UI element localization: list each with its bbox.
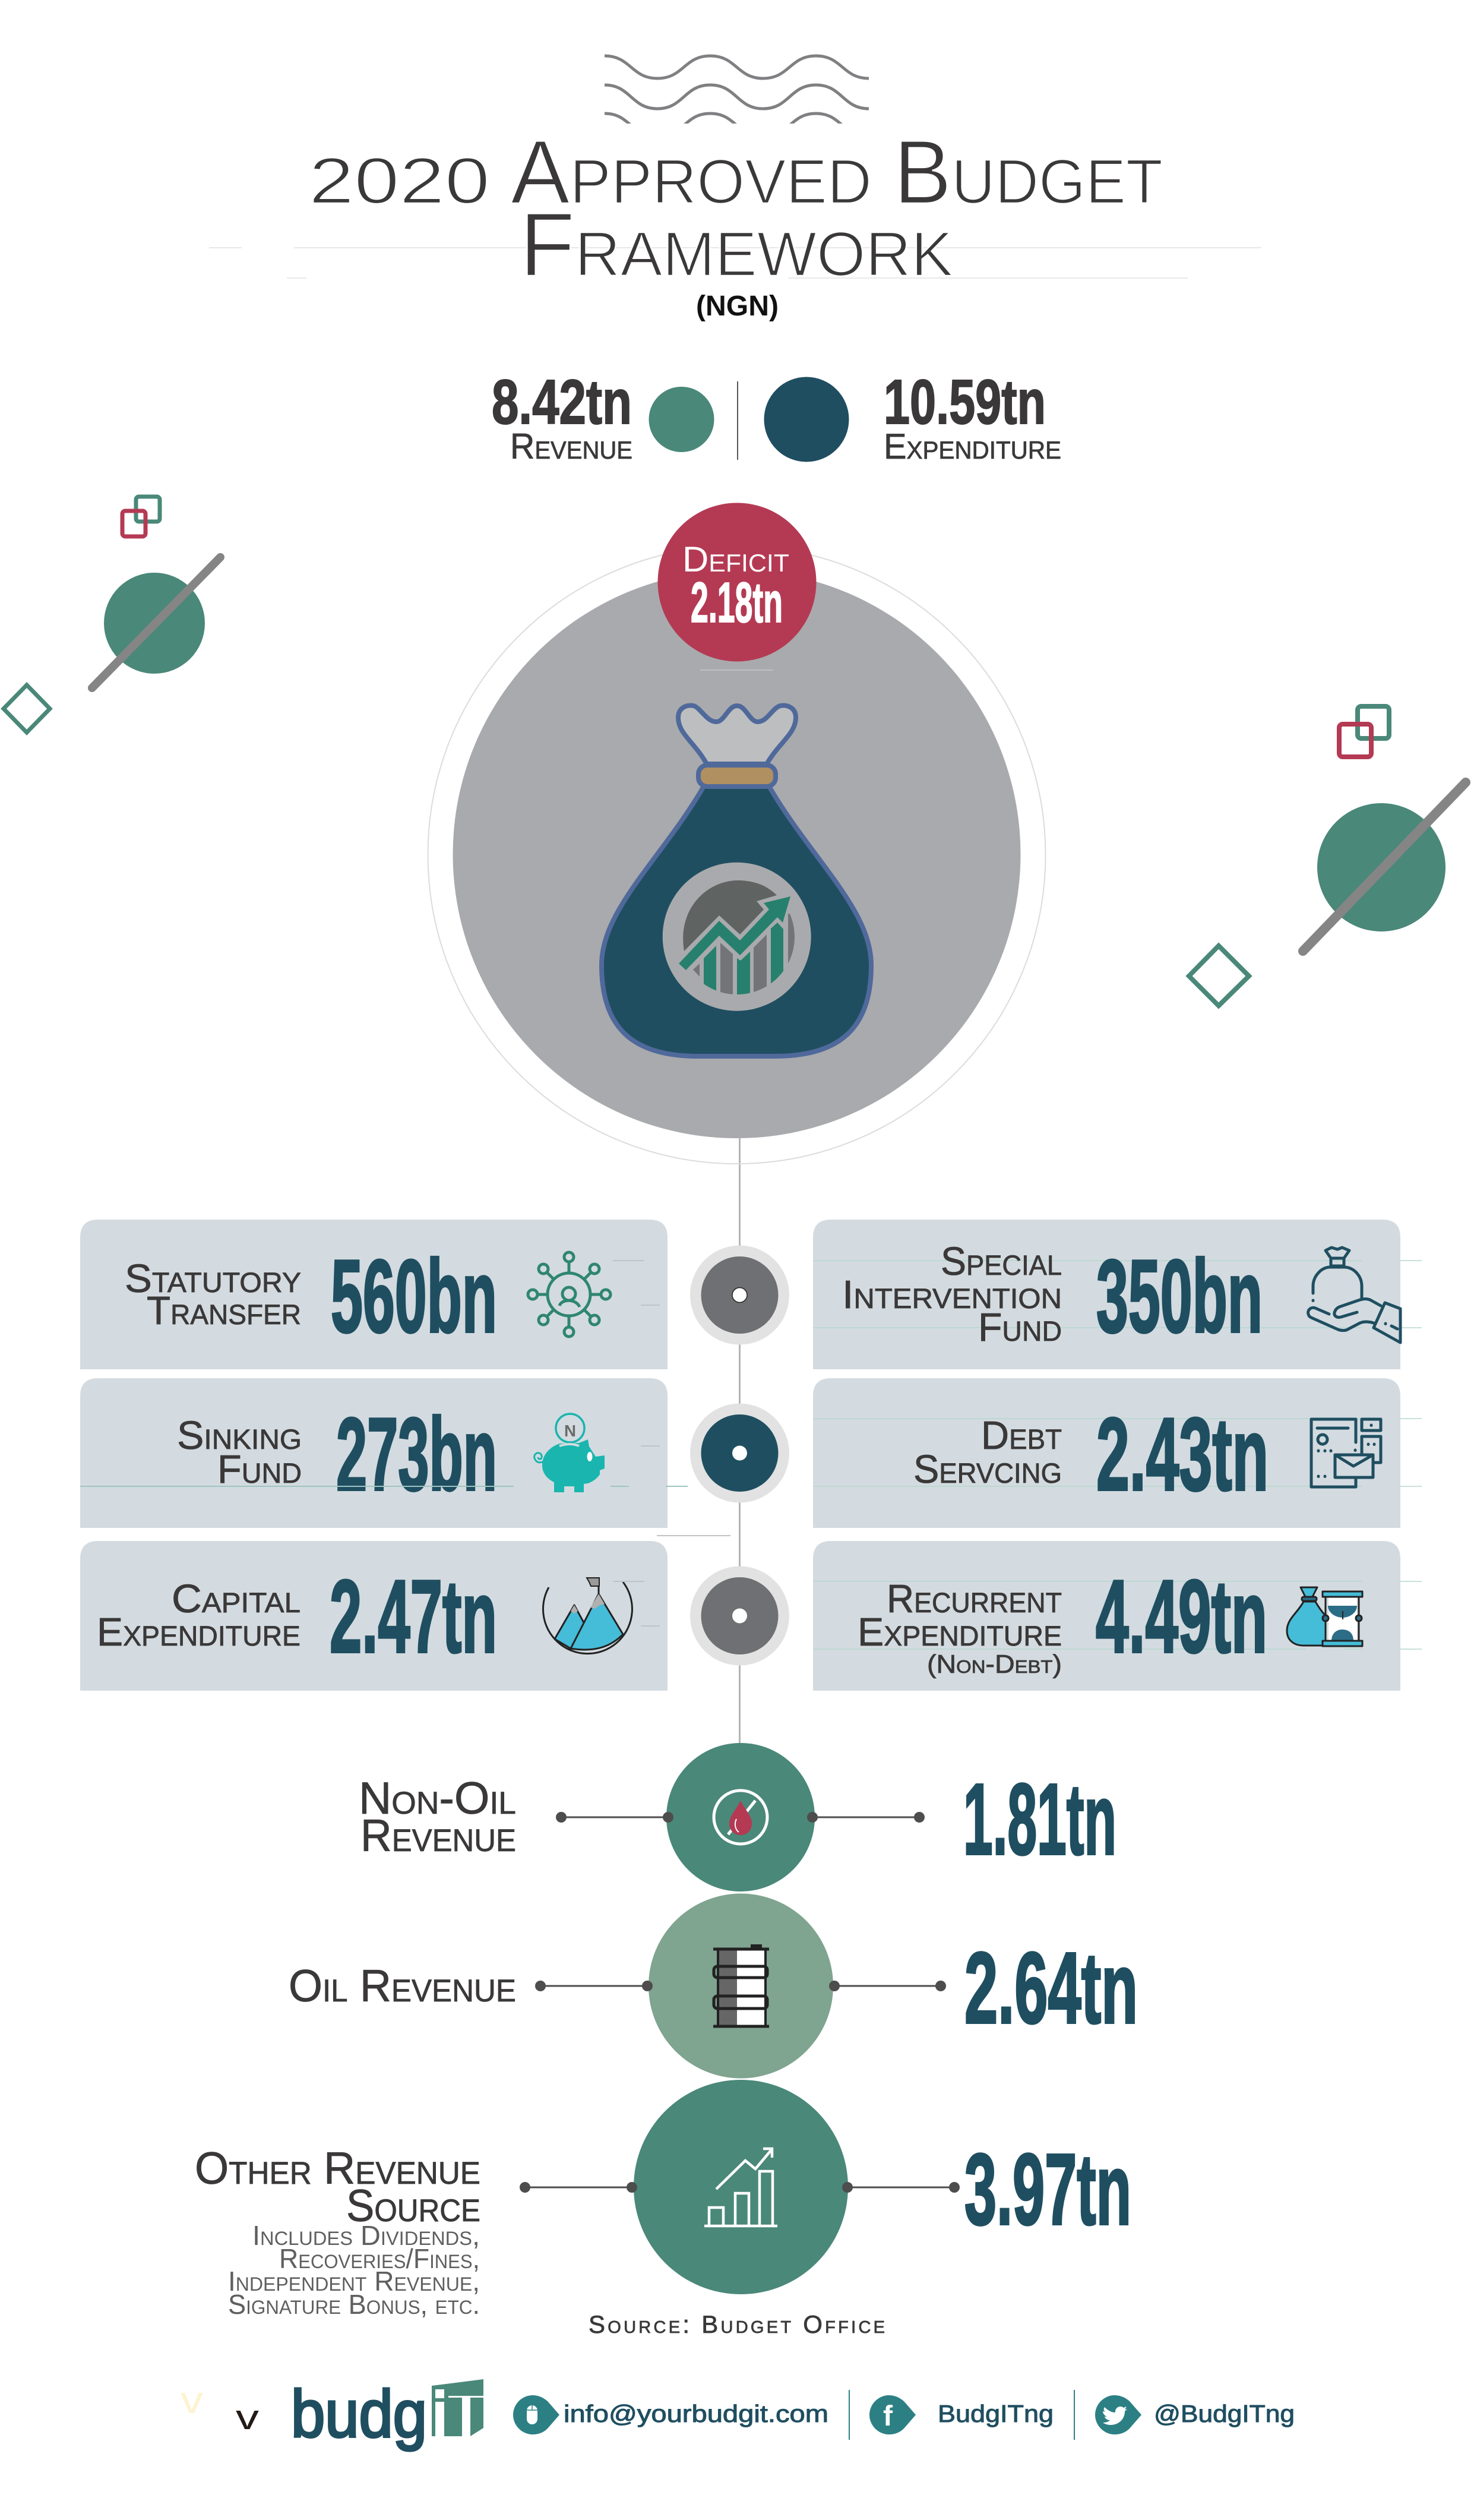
- panel: special intervention fund: [813, 1220, 1422, 1369]
- expenditure total: [764, 367, 1061, 466]
- panel: sinking fund: [80, 1378, 668, 1528]
- panel: special intervention fund: Fund: [978, 1305, 1062, 1350]
- deficit badge: Deficit: [682, 539, 789, 579]
- logo: budgIT: budg: [291, 2377, 427, 2451]
- panel: statutory transfer: Statutory: [125, 1256, 301, 1301]
- source note: Source: Budget Office: [589, 2310, 885, 2338]
- panel: capital expenditure: Capital: [172, 1577, 301, 1621]
- connector lines: [525, 1817, 954, 2187]
- panel: statutory transfer: 560bn: [331, 1238, 497, 1354]
- icon: growth chart: [704, 2149, 777, 2226]
- text block: revenue details: [228, 2220, 480, 2320]
- decorative chevrons: v: [236, 2398, 259, 2437]
- panel: capital expenditure: [80, 1541, 668, 1691]
- text block: revenue details: Independent Revenue,: [228, 2266, 480, 2297]
- icon: facebook: f: [883, 2401, 893, 2432]
- icon: facebook: [869, 2395, 916, 2434]
- panel: debt servicing: [813, 1378, 1422, 1528]
- panel: capital expenditure: 2.47tn: [330, 1558, 497, 1674]
- icon: network: [528, 1252, 611, 1337]
- title: Framework: [520, 194, 953, 295]
- icon: oil barrel: [713, 1944, 769, 2027]
- oil revenue: 2.64tn: [964, 1932, 1138, 2045]
- panel: recurrent expenditure: Recurrent: [887, 1577, 1062, 1621]
- panel: recurrent expenditure: 4.49tn: [1096, 1558, 1267, 1674]
- panel: capital expenditure: Expenditure: [97, 1610, 301, 1654]
- revenue total: 8.42tn: [492, 367, 632, 437]
- decoration: right planet: [1189, 706, 1466, 1006]
- other revenue source: 3.97tn: [964, 2133, 1131, 2246]
- text block: revenue details: Includes Dividends,: [252, 2220, 480, 2251]
- panel: sinking fund: Sinking: [177, 1413, 302, 1458]
- icon: hand holding bag: [1308, 1248, 1400, 1343]
- other revenue source: Source: [346, 2181, 480, 2231]
- text block: revenue details: Recoveries/Fines,: [279, 2243, 480, 2274]
- timeline node 3: [690, 1566, 789, 1666]
- icon: bag and hourglass: [1287, 1587, 1362, 1646]
- timeline spine: [739, 1138, 741, 1744]
- icon: no oil: [714, 1790, 767, 1844]
- faint lines: [209, 248, 1261, 278]
- panel: statutory transfer: [80, 1220, 668, 1369]
- title: Budget: [894, 122, 1163, 223]
- timeline node 2: [690, 1403, 789, 1503]
- title: [309, 122, 1163, 295]
- timeline node 1: [690, 1245, 789, 1345]
- central circle: [428, 546, 1045, 1164]
- deficit badge: [658, 503, 816, 662]
- icon: money bag: [602, 706, 871, 1056]
- title: 2020: [309, 144, 490, 217]
- icon: piggy bank: [534, 1414, 605, 1492]
- expenditure total: Expenditure: [884, 427, 1061, 466]
- panel: recurrent expenditure: (Non-Debt): [927, 1650, 1062, 1679]
- decorative chevrons: [181, 2379, 259, 2437]
- panel: debt servicing: Servcing: [913, 1447, 1062, 1492]
- revenue total: Revenue: [510, 427, 632, 466]
- non-oil revenue: Non-Oil: [359, 1773, 516, 1824]
- icon: twitter: [1095, 2395, 1141, 2434]
- panel: recurrent expenditure: Expenditure: [858, 1610, 1062, 1654]
- icon: piggy bank: N: [564, 1422, 576, 1440]
- contact: email: info@yourbudgit.com: [564, 2400, 828, 2427]
- icon: decorative waves: [605, 55, 869, 124]
- decorative chevrons: v: [181, 2379, 203, 2421]
- panel: sinking fund: Fund: [217, 1447, 302, 1492]
- panel: special intervention fund: Special: [941, 1239, 1062, 1284]
- panel: special intervention fund: Intervention: [842, 1272, 1062, 1317]
- contact: facebook: BudgITng: [938, 2400, 1054, 2427]
- contact: twitter: @BudgITng: [1154, 2400, 1295, 2427]
- panel: special intervention fund: 350bn: [1096, 1238, 1263, 1354]
- panel: sinking fund: 273bn: [336, 1396, 497, 1512]
- expenditure total: 10.59tn: [884, 367, 1046, 437]
- icon: documents and envelope: [1311, 1419, 1381, 1487]
- icon: mountains: [543, 1578, 632, 1654]
- panel: debt servicing: 2.43tn: [1096, 1396, 1269, 1512]
- oil revenue: [289, 1894, 1138, 2078]
- decoration: left planet: [4, 497, 220, 732]
- subtitle: currency: (NGN): [696, 290, 779, 322]
- revenue total: [492, 367, 714, 466]
- other revenue source: Other Revenue: [195, 2143, 480, 2194]
- deficit badge: 2.18tn: [691, 571, 783, 634]
- non-oil revenue: [359, 1743, 1116, 1891]
- non-oil revenue: 1.81tn: [963, 1763, 1116, 1876]
- non-oil revenue: Revenue: [360, 1811, 516, 1861]
- other revenue source: [195, 2080, 1131, 2320]
- panel: recurrent expenditure: [813, 1541, 1422, 1691]
- icon: email: [513, 2395, 559, 2434]
- text block: revenue details: Signature Bonus, etc.: [228, 2289, 480, 2320]
- oil revenue: Oil Revenue: [289, 1961, 516, 2011]
- panel: debt servicing: Debt: [981, 1413, 1062, 1458]
- panel: statutory transfer: Transfer: [147, 1289, 301, 1333]
- title: Approved: [511, 122, 872, 223]
